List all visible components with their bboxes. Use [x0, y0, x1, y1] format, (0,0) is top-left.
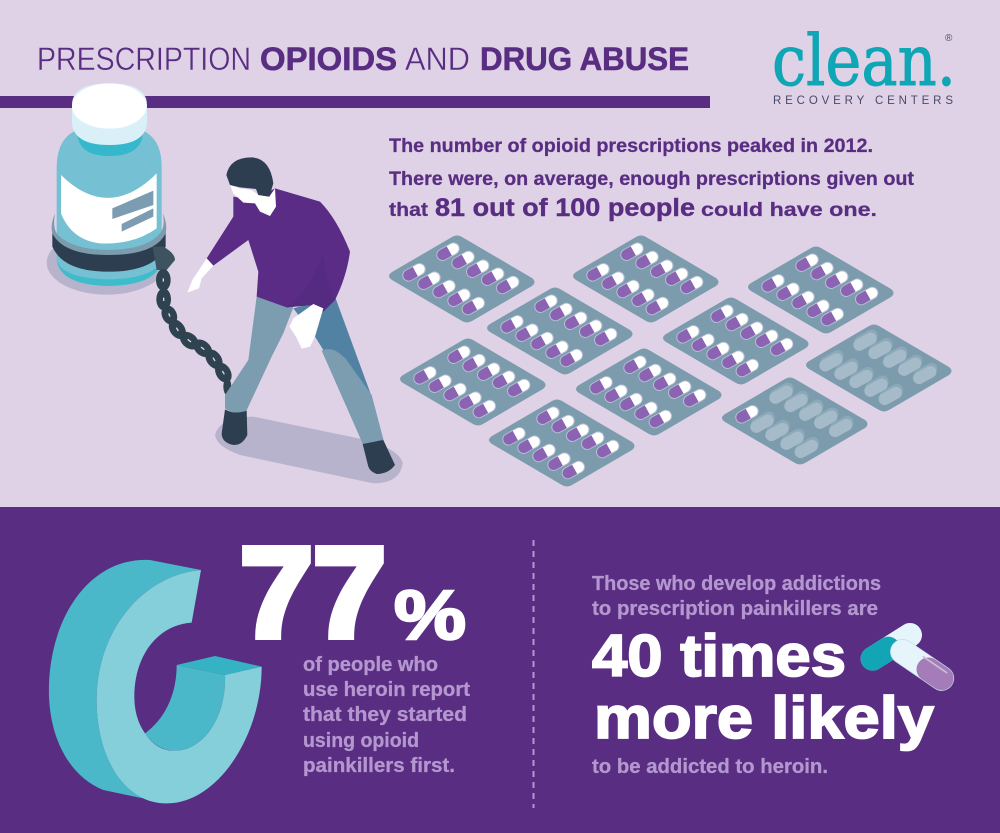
- stat: 77%: [240, 522, 466, 664]
- background panel: top: [0, 0, 1000, 507]
- panel: bottom statistics: [0, 507, 1000, 833]
- intro text: There were, on average, enough prescriptions given out: [389, 169, 915, 190]
- empty blister pack: [806, 324, 952, 412]
- text: those who develop addictions: to prescription painkillers are: [592, 598, 878, 620]
- intro text: [389, 136, 915, 222]
- chain: [156, 269, 235, 395]
- blister packs: [389, 236, 952, 486]
- pill bottle: [57, 83, 162, 286]
- bottle shadow: [47, 231, 167, 295]
- logo: clean recovery centers: clean.: [772, 20, 956, 102]
- title: DRUG ABUSE: [480, 41, 689, 77]
- icon: capsules: [873, 635, 947, 678]
- title rule: [0, 96, 710, 108]
- stat: 40 times more likely: 40 times: [592, 623, 846, 689]
- title: AND: [405, 41, 470, 77]
- stat: 40 times more likely: more likely: [594, 685, 934, 751]
- text: those who develop addictions: [592, 573, 881, 620]
- stat: 77%: 77: [240, 522, 386, 664]
- bottle strap: [52, 213, 175, 272]
- intro text: 81 out of 100 people: [435, 194, 695, 222]
- logo: clean recovery centers: RECOVERY CENTERS: [773, 95, 953, 107]
- stat description: that they started: [303, 704, 467, 726]
- illustration: pill bottle chained to a man: [47, 83, 403, 483]
- text: those who develop addictions: Those who develop addictions: [592, 573, 881, 595]
- title: [37, 41, 689, 77]
- intro text: The number of opioid prescriptions peaked in 2012.: [389, 136, 873, 157]
- stat description: of people who: [303, 654, 438, 676]
- divider: [532, 540, 534, 808]
- man shadow: [215, 417, 403, 483]
- stat: 40 times more likely: [592, 623, 934, 751]
- logo: clean recovery centers: ®: [945, 33, 953, 44]
- stat description: using opioid: [303, 730, 419, 752]
- chart: 77 percent 3D ring: [49, 560, 262, 803]
- nearly empty blister pack: [722, 378, 868, 464]
- stat: 77%: %: [394, 576, 466, 654]
- text: to be addicted to heroin: to be addicted to heroin.: [592, 756, 828, 778]
- intro text: that: [389, 200, 429, 221]
- title: OPIOIDS: [260, 41, 397, 77]
- stat description: use heroin report: [303, 679, 470, 701]
- man: [187, 157, 395, 474]
- intro text: could have one.: [701, 200, 877, 221]
- stat description: [303, 654, 470, 777]
- title: PRESCRIPTION: [37, 41, 251, 77]
- stat description: painkillers first.: [303, 755, 455, 777]
